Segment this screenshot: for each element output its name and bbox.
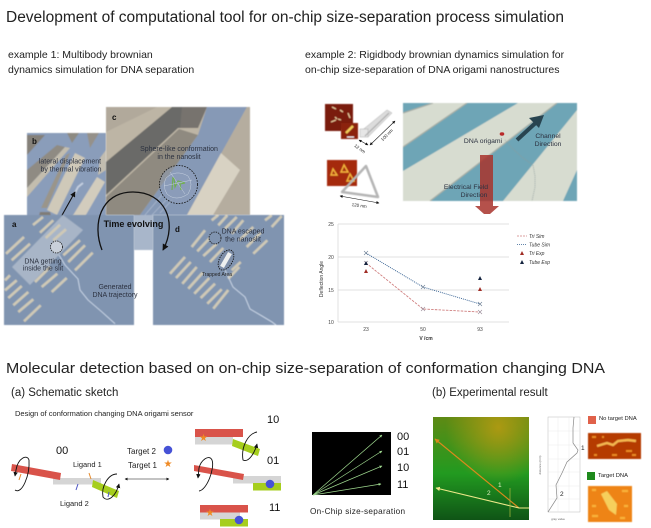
chart grid	[338, 224, 509, 322]
diagram: sensor state 11: ★	[206, 508, 215, 519]
chart: line profile: distance (mm)	[538, 455, 542, 475]
legend: targets	[125, 446, 173, 479]
panel b caption	[39, 158, 102, 174]
dashed ellipse: trapped DNA	[215, 247, 237, 273]
x axis ticks	[363, 327, 483, 333]
panel c: sphere-like conformation	[106, 107, 250, 250]
diagram: sensor state 10	[195, 414, 279, 461]
panel b letter: b	[32, 137, 37, 146]
panel c caption: Sphere-like conformation	[140, 146, 218, 153]
icon: tube origami model	[360, 110, 392, 137]
y axis ticks: 20	[328, 255, 334, 261]
x axis ticks: 93	[477, 327, 483, 333]
panel b caption: by thermal vibration	[40, 166, 102, 174]
electrical field label: Electrical Field	[444, 184, 488, 191]
micrograph: tube origami large	[325, 104, 353, 131]
title: Development of computational tool for on-chip size-separation process simulation	[6, 9, 564, 26]
y axis ticks: 15	[328, 288, 334, 294]
panel a caption	[23, 258, 63, 272]
beam labels: 2	[487, 490, 491, 497]
micrograph: target DNA	[588, 486, 632, 522]
y axis title: Deflection Angle	[319, 261, 325, 297]
target 1: ★	[164, 459, 173, 470]
panel a caption: inside the slit	[23, 266, 63, 272]
legend: target DNA: Target DNA	[598, 473, 628, 479]
chart: line profile: 1	[581, 445, 585, 452]
x axis ticks: 23	[363, 327, 369, 333]
channel direction label	[535, 133, 562, 148]
chart legend: Tri Exp	[529, 251, 545, 257]
legend: no target DNA	[588, 416, 637, 424]
chart: line profile: gray value	[551, 517, 565, 521]
arrow: time evolving arc	[98, 192, 169, 250]
electrical field label	[444, 184, 488, 199]
chart: line profile	[538, 417, 585, 521]
panel a letter: a	[12, 220, 17, 229]
diagram: sensor state 01	[194, 455, 281, 491]
text block: sensor design caption: Design of conformation changing DNA origami sensor	[15, 409, 194, 418]
figure: multibody brownian dynamics time evolution	[4, 107, 284, 325]
ray labels: 11	[397, 479, 408, 491]
arrow: electrical field direction	[475, 155, 499, 214]
panel a: DNA getting inside the slit	[4, 215, 134, 325]
panel c caption: in the nanoslit	[157, 154, 201, 161]
ray labels: 00	[397, 431, 409, 443]
dashed circle: DNA at slit	[50, 241, 62, 253]
panel d: DNA escaped the nanoslit	[153, 215, 284, 325]
diagram: sensor state 00	[11, 445, 119, 508]
beam labels	[487, 482, 502, 497]
panel d caption: the nanoslit	[225, 236, 261, 244]
text block: example 2 heading: example 2: Rigidbody brownian dynamics simulation for	[305, 49, 565, 61]
dimension: 100 nm: 100 nm	[380, 128, 394, 142]
figure: DNA origami structures	[325, 104, 395, 209]
state label 00: 00	[56, 445, 68, 457]
dimension: 120 nm: 120 nm	[351, 202, 367, 209]
x axis title: V /cm	[419, 336, 433, 342]
chart legend: Tri Sim	[529, 234, 544, 240]
chart: on-chip separation rays	[312, 432, 391, 495]
subheading: experimental result: (b) Experimental result	[432, 387, 548, 399]
chart: line profile: 2	[560, 491, 564, 498]
micrograph: tube origami small	[341, 123, 358, 139]
figure: rigidbody simulation channel view	[403, 103, 577, 214]
series: Tube Exp	[364, 261, 482, 280]
series: Tube Sim	[364, 251, 482, 306]
chart legend: Tube Exp	[529, 260, 550, 266]
rotation arrow: left	[15, 457, 29, 491]
ray labels: 01	[397, 446, 409, 458]
diagram: sensor state 10: ★	[199, 433, 208, 444]
chart legend	[517, 234, 550, 266]
diagram: sensor state 10: 10	[267, 414, 279, 426]
target 1: Target 1	[128, 461, 157, 470]
trapped area caption: Trapped Area	[202, 272, 232, 278]
panel c letter: c	[112, 113, 117, 122]
origami bars	[11, 464, 119, 498]
ligand 2 label: Ligand 2	[60, 499, 89, 508]
target 2: Target 2	[127, 447, 156, 456]
chart legend: Tube Sim	[529, 242, 550, 248]
panel d letter: d	[175, 225, 180, 234]
target 1	[128, 459, 173, 470]
DNA origami marker	[500, 132, 504, 136]
channel direction label: Direction	[535, 141, 562, 148]
channel diagram	[403, 103, 577, 201]
y axis ticks	[328, 222, 334, 326]
ray labels: 10	[397, 462, 409, 474]
series: Tri Exp	[364, 269, 482, 291]
series: Tri Sim	[364, 261, 482, 314]
rotation arrow: right	[103, 474, 119, 499]
channel direction label: Channel	[535, 133, 561, 140]
text block: example 1 heading: example 1: Multibody brownian	[8, 49, 153, 61]
text block: example 1 heading	[8, 49, 194, 76]
micrograph: no target DNA	[588, 433, 641, 459]
panel d caption	[222, 228, 265, 244]
diagram: sensor state 11	[200, 502, 280, 526]
subheading: schematic sketch: (a) Schematic sketch	[11, 387, 118, 399]
DNA origami label: DNA origami	[464, 138, 503, 145]
trajectory caption: Generated	[98, 284, 132, 291]
chart: deflection angle vs voltage	[319, 222, 550, 342]
trajectory caption: DNA trajectory	[92, 292, 138, 299]
text block: example 1 heading: dynamics simulation for DNA separation	[8, 64, 194, 76]
trajectory caption	[92, 284, 138, 299]
panel a caption: DNA getting	[24, 258, 62, 266]
panel b caption: lateral displacement	[39, 158, 101, 166]
text block: example 2 heading: on-chip size-separation of DNA origami nanostructures	[305, 64, 559, 76]
beam labels: 1	[498, 482, 502, 489]
y axis ticks: 10	[328, 320, 334, 326]
dimension: 12 nm: 12 nm	[353, 143, 367, 155]
micrograph: triangle origami	[327, 160, 357, 186]
arrow: reversible binding	[125, 478, 169, 480]
icon: triangle origami model	[342, 166, 378, 197]
y axis ticks: 25	[328, 222, 334, 228]
section heading: Molecular detection based on on-chip size-separation of conformation changing DNA	[6, 360, 605, 377]
ray labels	[397, 431, 409, 491]
legend: target DNA	[587, 472, 628, 480]
arrow: channel direction	[517, 115, 544, 140]
ligand 1 label: Ligand 1	[73, 460, 102, 469]
text block: example 2 heading	[305, 49, 565, 76]
legend: no target DNA: No target DNA	[599, 416, 637, 422]
diagram: sensor state 11: 11	[269, 502, 280, 514]
on-chip caption: On-Chip size-separation	[310, 507, 405, 516]
panel c caption	[140, 146, 218, 161]
arrow: displacement direction	[61, 192, 75, 217]
electrical field label: Direction	[461, 192, 488, 199]
micrograph: experimental fluorescence result	[433, 417, 529, 520]
time evolving label: Time evolving	[104, 219, 163, 229]
dashed circle: sphere-like DNA	[160, 166, 198, 204]
x axis ticks: 50	[420, 327, 426, 333]
diagram: sensor state 01: 01	[267, 455, 279, 467]
panel d caption: DNA escaped	[222, 228, 265, 236]
panel b: lateral displacement	[27, 133, 106, 220]
dashed circle: escaped DNA	[209, 232, 221, 244]
